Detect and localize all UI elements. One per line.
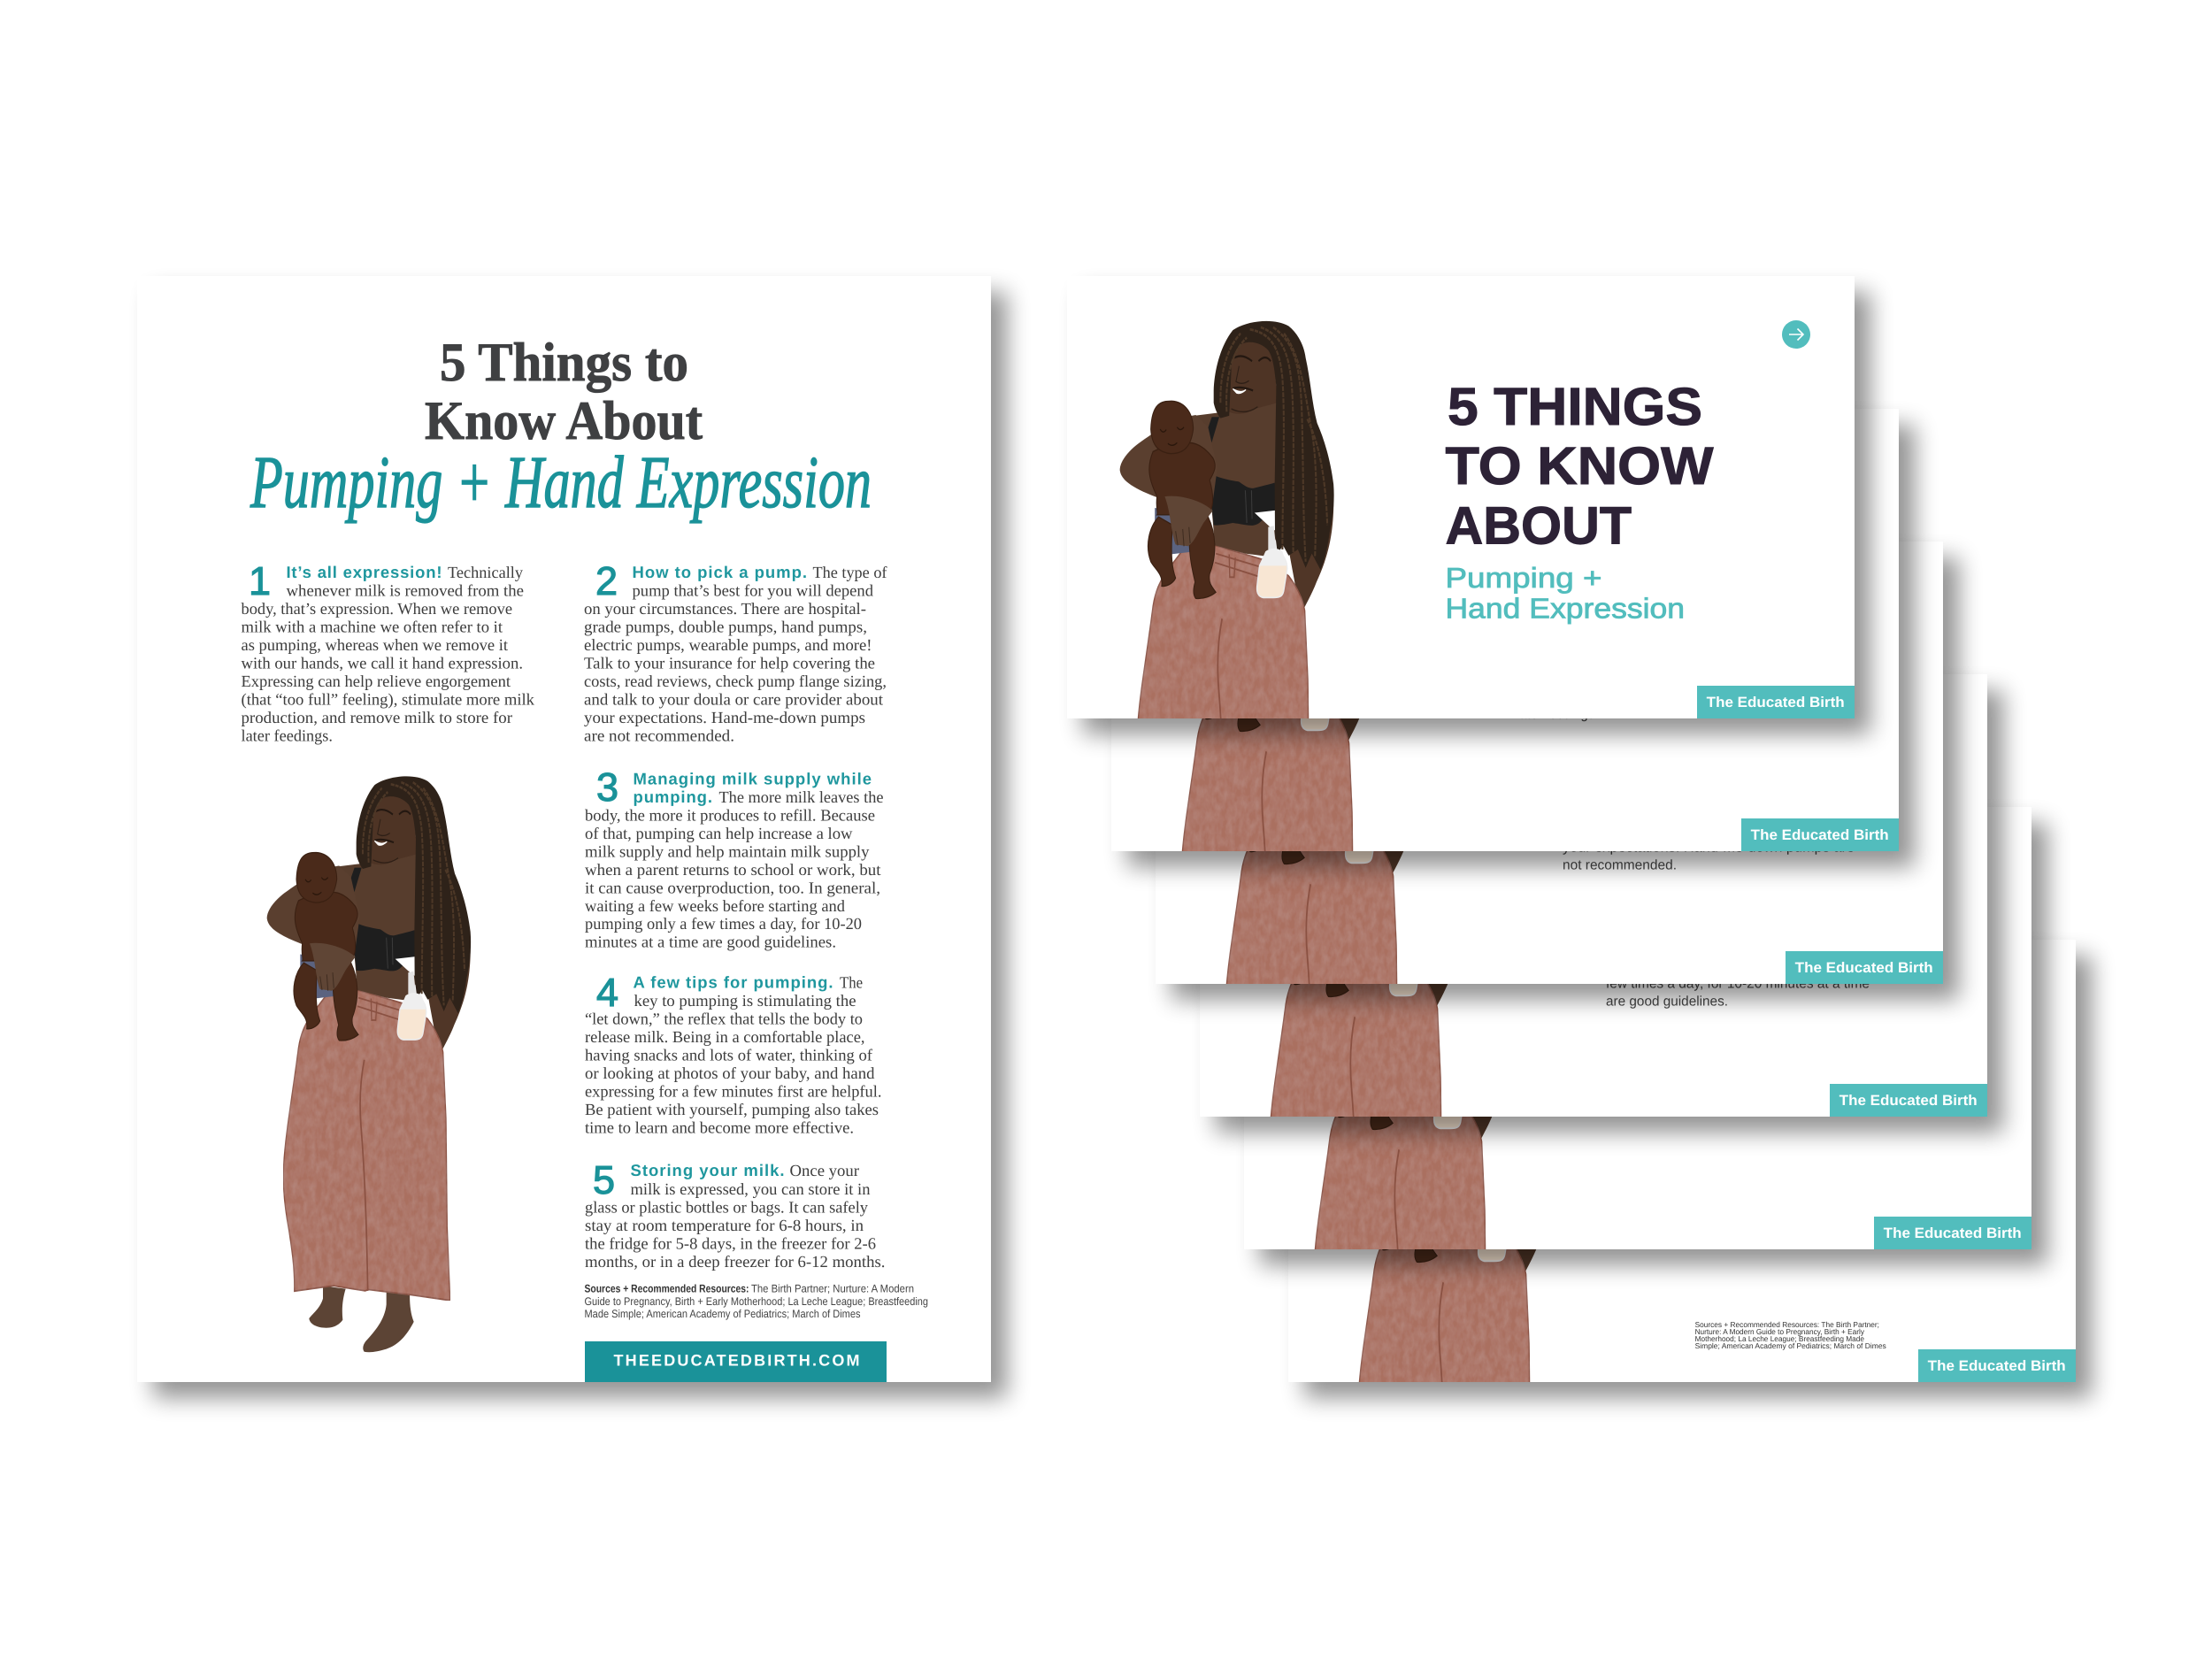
text block: item 1: whenever milk is removed from the xyxy=(287,582,524,600)
text block: sources xyxy=(584,1283,928,1320)
text block: item 1 xyxy=(241,558,535,745)
text block: item 1: as pumping, whereas when we remove it xyxy=(241,637,509,655)
text block: item 3: it can cause overproduction, too. In general, xyxy=(585,879,880,897)
text block: item 4 xyxy=(585,970,881,1138)
text block: item 2: How to pick a pump. xyxy=(632,563,807,581)
panel: printable handout xyxy=(137,276,1007,1398)
partly hidden body text: later feedings. xyxy=(1517,707,1598,722)
illustration: parent holding baby and pumping xyxy=(267,776,471,1352)
text block: item 1: production, and remove milk to store for xyxy=(241,710,512,727)
panel: slide 3 xyxy=(1156,541,1959,1191)
text block: item 4: “let down,” the reflex that tells the body to xyxy=(585,1010,863,1028)
text block: item 4: time to learn and become more effective. xyxy=(585,1120,854,1138)
brand tab xyxy=(1786,951,1943,984)
brand tab: The Educated Birth xyxy=(1751,827,1889,843)
text block: item 2: 2 xyxy=(595,558,618,603)
text block: item 1: (that “too full” feeling), stimulate more milk xyxy=(241,692,535,710)
sources note: Sources + Recommended Resources: The Birth Partner; xyxy=(1695,1320,1879,1329)
text block: item 1: later feedings. xyxy=(241,727,333,745)
brand tab: The Educated Birth xyxy=(1707,695,1845,710)
heading: 5 things to know about: TO KNOW xyxy=(1446,436,1714,495)
heading: 5 things to know about: Know About xyxy=(425,391,703,451)
text block: item 5: Storing your milk. xyxy=(630,1161,784,1179)
text block: item 2: The type of xyxy=(812,565,887,582)
partly hidden body text: few times a day, for 10-20 minutes at a time xyxy=(1606,977,1870,991)
text block: item 3: pumping. xyxy=(634,787,712,806)
text block: item 4: having snacks and lots of water, thinking of xyxy=(585,1048,873,1065)
text block: item 2: and talk to your doula or care provider about xyxy=(584,692,884,710)
text block: item 5: months, or in a deep freezer for 6-12 months. xyxy=(585,1254,885,1271)
text block: item 5: stay at room temperature for 6-8 hours, in xyxy=(585,1217,864,1235)
partly hidden body text: are good guidelines. xyxy=(1606,995,1728,1009)
text block: sources: Made Simple; American Academy of Pediatrics; March of Dimes xyxy=(584,1308,860,1320)
brand tab: The Educated Birth xyxy=(1795,960,1933,976)
footer button: website xyxy=(585,1341,887,1382)
text block: item 4: expressing for a few minutes first are helpful. xyxy=(585,1083,881,1101)
text block: item 3: of that, pumping can help increase a low xyxy=(585,826,853,843)
footer button: website: THEEDUCATEDBIRTH.COM xyxy=(614,1352,860,1370)
partly hidden body text: effective. xyxy=(1650,1103,1700,1118)
brand tab xyxy=(1741,818,1899,851)
text block: item 2: on your circumstances. There are hospital- xyxy=(584,601,866,618)
text block: item 5: milk is expressed, you can store it in xyxy=(630,1181,871,1199)
panel: slide 5 xyxy=(1244,807,2047,1456)
icon: next arrow xyxy=(1782,320,1810,349)
subheading: pumping + hand expression: Hand Expression xyxy=(1446,593,1685,625)
partly hidden body text: your expectations. Hand-me-down pumps are xyxy=(1563,841,1855,855)
brand tab: The Educated Birth xyxy=(1928,1358,2066,1374)
text block: item 1: milk with a machine we often refer to it xyxy=(241,619,503,637)
text block: sources: Sources + Recommended Resources: xyxy=(584,1283,749,1295)
text block: item 3: 3 xyxy=(596,764,618,810)
text block: item 3: pumping only a few times a day, for 10-20 xyxy=(585,916,862,933)
heading: 5 things to know about: ABOUT xyxy=(1446,495,1632,556)
text block: item 2 xyxy=(584,558,887,745)
text block: item 1: body, that’s expression. When we remove xyxy=(241,601,512,618)
text block: item 5: glass or plastic bottles or bags. It can safely xyxy=(585,1200,869,1217)
sources note: Nurture: A Modern Guide to Pregnancy, Birth + Early xyxy=(1695,1327,1865,1336)
text block: item 5: 5 xyxy=(593,1157,615,1202)
text block: item 4: The xyxy=(840,975,863,993)
text block: item 3 xyxy=(585,764,883,952)
text block: item 1: 1 xyxy=(249,558,271,603)
text block: item 3: The more milk leaves the xyxy=(718,789,883,807)
brand tab xyxy=(1697,686,1855,718)
text block: item 4: 4 xyxy=(596,970,618,1015)
heading: 5 things to know about: 5 THINGS xyxy=(1448,377,1702,436)
text block: item 1: It’s all expression! xyxy=(287,563,442,581)
text block: item 4: release milk. Being in a comfortable place, xyxy=(585,1029,865,1047)
text block: item 5: Once your xyxy=(789,1163,859,1180)
text block: item 2: electric pumps, wearable pumps, and more! xyxy=(584,637,872,655)
panel: slide 4 xyxy=(1200,674,2003,1324)
brand tab: The Educated Birth xyxy=(1839,1093,1978,1109)
text block: item 2: pump that’s best for you will depend xyxy=(632,582,874,600)
text block: item 1: Expressing can help relieve engorgement xyxy=(241,673,511,691)
text block: item 5 xyxy=(585,1157,885,1271)
text block: item 2: Talk to your insurance for help covering the xyxy=(584,655,875,672)
heading: 5 things to know about xyxy=(425,333,703,451)
sources note: Motherhood; La Leche League; Breastfeeding Made xyxy=(1695,1334,1864,1343)
partly hidden body text xyxy=(1563,841,1855,872)
text block: item 3: milk supply and help maintain milk supply xyxy=(585,844,870,862)
text block: item 5: the fridge for 5-8 days, in the freezer for 2-6 xyxy=(585,1235,876,1253)
panel: slide 1 cover xyxy=(1067,276,1870,926)
text block: sources: The Birth Partner; Nurture: A Modern xyxy=(751,1283,914,1295)
text block: item 4: key to pumping is stimulating the xyxy=(634,993,856,1010)
sources note: Simple; American Academy of Pediatrics; March of Dimes xyxy=(1695,1341,1886,1350)
illustration: parent holding baby and pumping xyxy=(1120,321,1334,926)
partly hidden body text: not recommended. xyxy=(1563,858,1677,872)
text block: item 1: Technically xyxy=(448,565,524,582)
brand tab xyxy=(1830,1084,1987,1117)
text block: item 3: waiting a few weeks before starting and xyxy=(585,898,846,916)
heading: script subtitle: Pumping + Hand Expression xyxy=(250,442,872,524)
brand tab xyxy=(1874,1217,2032,1249)
panel: slide 6 xyxy=(1288,940,2092,1589)
text block: item 1: with our hands, we call it hand expression. xyxy=(241,655,523,672)
subheading: pumping + hand expression xyxy=(1446,562,1685,625)
brand tab xyxy=(1918,1349,2076,1382)
text block: item 2: grade pumps, double pumps, hand pumps, xyxy=(584,619,867,637)
heading: 5 things to know about: 5 Things to xyxy=(440,333,688,393)
text block: item 4: A few tips for pumping. xyxy=(634,973,833,991)
text block: item 2: are not recommended. xyxy=(584,727,734,745)
text block: item 2: your expectations. Hand-me-down pumps xyxy=(584,710,865,727)
text block: sources: Guide to Pregnancy, Birth + Early Motherhood; La Leche League; Breastfeeding xyxy=(584,1295,928,1308)
partly hidden body text xyxy=(1606,977,1870,1009)
text block: item 2: costs, read reviews, check pump flange sizing, xyxy=(584,673,887,691)
text block: item 3: Managing milk supply while xyxy=(634,770,872,787)
sources note xyxy=(1695,1320,1886,1350)
subheading: pumping + hand expression: Pumping + xyxy=(1446,562,1601,594)
text block: item 3: minutes at a time are good guidelines. xyxy=(585,934,836,952)
text block: item 4: Be patient with yourself, pumping also takes xyxy=(585,1102,879,1119)
text block: item 3: body, the more it produces to refill. Because xyxy=(585,807,875,825)
text block: item 3: when a parent returns to school or work, but xyxy=(585,862,881,879)
text block: item 4: or looking at photos of your baby, and hand xyxy=(585,1065,875,1083)
panel: slide 2 xyxy=(1111,409,1915,1058)
brand tab: The Educated Birth xyxy=(1884,1225,2022,1241)
heading: 5 things to know about xyxy=(1446,377,1714,556)
